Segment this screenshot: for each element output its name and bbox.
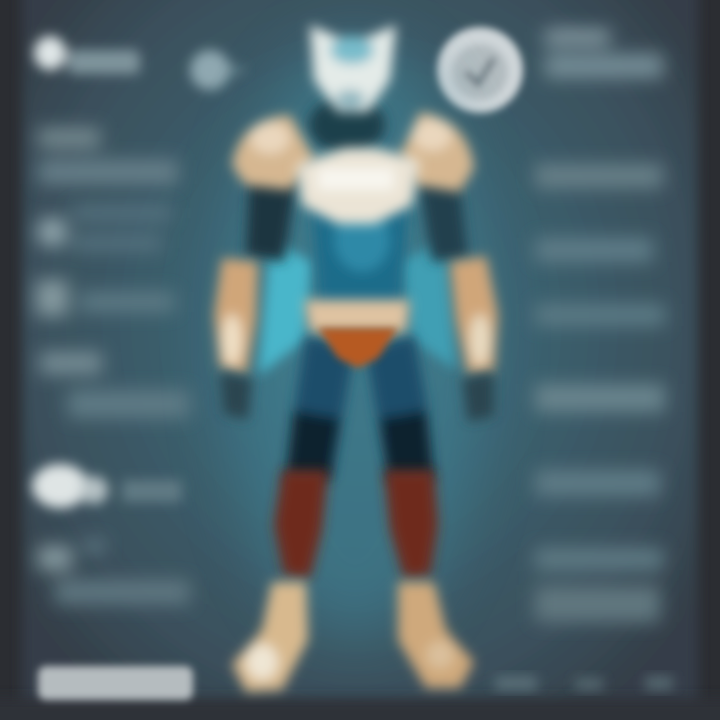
figure: head mask	[310, 25, 396, 112]
figure: hands	[220, 372, 494, 422]
footer: right small labels	[495, 676, 673, 690]
figure: cyan under-arm panels	[258, 240, 456, 376]
icon: round check badge	[437, 27, 523, 113]
text block: left column item 6	[38, 540, 190, 604]
figure: belt	[304, 300, 410, 332]
text block: right column item 6	[535, 548, 663, 622]
text block: right column item 1	[535, 164, 663, 188]
heading: right title	[545, 30, 663, 78]
figure: shin guards	[274, 470, 438, 578]
text block: left column item 1	[38, 128, 178, 184]
text block: left column item 2	[37, 206, 172, 250]
figure: shoulders	[232, 112, 474, 192]
figure: orange brief	[318, 328, 398, 368]
text block: right column item 2	[535, 238, 653, 262]
figure: chest plate	[296, 148, 420, 224]
figure: boots	[232, 582, 474, 692]
button: bottom left label	[38, 666, 193, 700]
text block: right column item 4	[535, 384, 665, 412]
text block: right column item 3	[535, 304, 665, 326]
text block: left column item 4	[40, 352, 190, 418]
figure: hero character	[214, 25, 498, 692]
figure: forearms	[214, 256, 498, 375]
figure: torso	[312, 205, 408, 305]
icon: small round badge	[190, 50, 244, 90]
text block: left column item 3	[36, 280, 175, 316]
figure: glow	[225, 40, 485, 640]
text block: right column item 5	[535, 470, 660, 496]
figure: upper arms	[246, 170, 468, 262]
text block: left highlighted label	[32, 464, 182, 508]
figure: neck	[309, 97, 385, 153]
figure: thighs	[286, 335, 434, 480]
heading: left title	[34, 36, 140, 74]
